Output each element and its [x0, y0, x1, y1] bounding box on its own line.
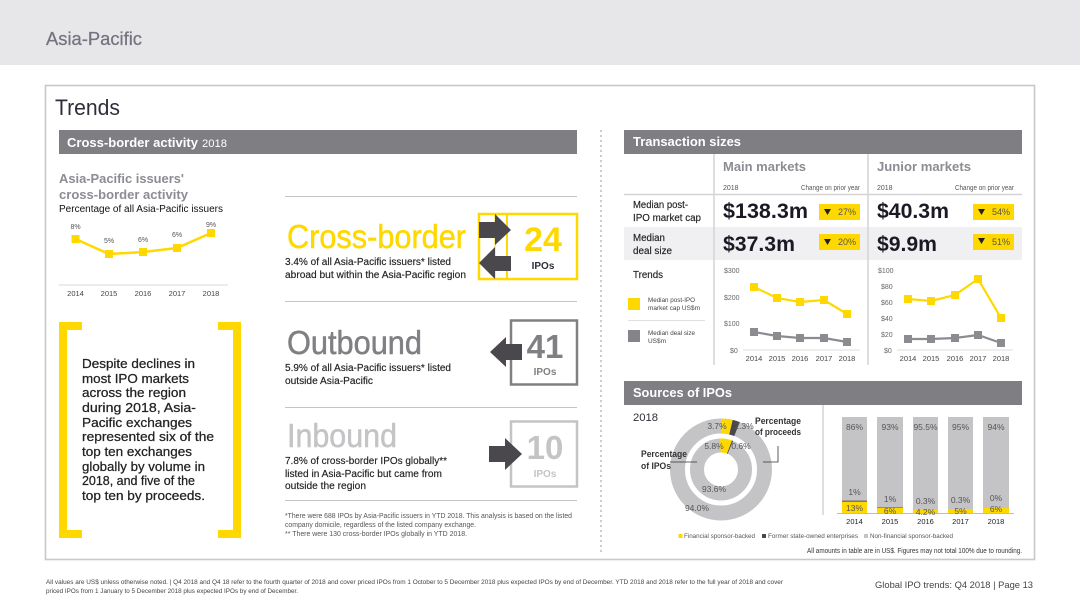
column heading: main markets: 2018	[723, 185, 739, 192]
line chart: junior markets: 2016	[947, 354, 963, 363]
line chart: main markets: 2015	[769, 354, 785, 363]
row: median deal size: 51%	[992, 237, 1010, 247]
trends legend: US$m	[648, 338, 666, 345]
block: outbound: outside Asia-Pacific	[285, 376, 373, 387]
callout with yellow brackets: across the region	[82, 386, 186, 400]
subheading: Asia-Pacific issuers	[59, 172, 223, 215]
column heading: main markets: Main markets	[723, 159, 806, 174]
block: outbound	[285, 320, 577, 387]
header band: Asia-Pacific	[46, 29, 142, 49]
line chart: cross-border percentage: 2018	[203, 289, 219, 298]
page number: Global IPO trends: Q4 2018 | Page 13	[875, 580, 1033, 591]
line chart: cross-border percentage: 9%	[206, 222, 216, 229]
line chart: main markets: 2016	[792, 354, 808, 363]
callout with yellow brackets: Pacific exchanges	[82, 416, 192, 430]
callout with yellow brackets: during 2018, Asia-	[82, 401, 196, 415]
line chart: junior markets: $0	[884, 348, 892, 355]
row: median deal size: Median	[633, 233, 665, 244]
callout with yellow brackets: most IPO markets	[82, 372, 189, 386]
footnotes: company domicile, regardless of the listed company exchange.	[285, 522, 476, 529]
donut chart: 2018: 93.6%	[702, 484, 726, 494]
block: inbound: outside the region	[285, 481, 366, 492]
column heading: main markets: Change on prior year	[801, 185, 861, 192]
donut chart: 2018: Percentage	[641, 449, 687, 459]
section heading: cross-border activity: 2018	[202, 138, 227, 150]
section heading: cross-border activity: Cross-border activity	[67, 135, 199, 150]
section heading: transaction sizes	[624, 130, 1022, 154]
main panel frame	[46, 86, 1034, 560]
line chart: junior markets: $20	[881, 332, 893, 339]
legend: IPO sources: Former state-owned enterprises	[768, 533, 859, 540]
row: median deal size: $37.3m	[723, 233, 795, 256]
stacked bar chart: 2014 to 2018: 2014	[846, 517, 863, 526]
legend: IPO sources	[678, 533, 953, 540]
line chart: cross-border percentage: 5%	[104, 238, 114, 245]
block: outbound: IPOs	[534, 367, 557, 378]
line chart: main markets: $200	[724, 295, 740, 302]
callout with yellow brackets: Despite declines in	[82, 357, 195, 371]
callout with yellow brackets: represented six of the	[82, 430, 214, 444]
row: median deal size: $9.9m	[877, 233, 937, 256]
stacked bar chart: 2014 to 2018: 1%	[848, 487, 861, 497]
trends legend: Median deal size	[648, 330, 695, 337]
donut chart: 2018: of IPOs	[641, 461, 671, 471]
callout with yellow brackets: globally by volume in	[82, 460, 205, 474]
line chart: junior markets	[878, 268, 1013, 363]
donut chart: 2018: 94.0%	[685, 503, 709, 513]
row: median post-IPO market cap: $40.3m	[877, 200, 949, 223]
line chart: cross-border percentage: 6%	[138, 237, 148, 244]
callout with yellow brackets: 2018, and five of the	[82, 474, 195, 488]
donut chart: 2018: of proceeds	[755, 427, 801, 437]
panel: transaction sizes	[624, 130, 1022, 365]
column heading: junior markets: 2018	[877, 185, 893, 192]
panel: sources of IPOs	[624, 381, 1022, 555]
line chart: cross-border percentage: 2016	[135, 289, 151, 298]
line chart: main markets: 2018	[839, 354, 855, 363]
line chart: main markets: $100	[724, 321, 740, 328]
stacked bar chart: 2014 to 2018: 93%	[881, 422, 899, 432]
line chart: cross-border percentage: 2015	[101, 289, 117, 298]
row: median deal size	[633, 233, 1014, 257]
column heading: main markets	[723, 159, 861, 192]
line chart: main markets: $0	[730, 348, 738, 355]
icon: arrows in and out	[479, 214, 511, 279]
header band	[0, 0, 1080, 65]
subheading: Asia-Pacific issuers: Percentage of all Asia-Pacific issuers	[59, 204, 223, 215]
line chart: cross-border percentage: 8%	[70, 224, 81, 231]
block: inbound: Inbound	[287, 417, 397, 454]
donut chart: 2018: Percentage	[755, 416, 801, 426]
block: outbound: 5.9% of all Asia-Pacific issuers* listed	[285, 363, 451, 374]
line chart: junior markets: 2014	[900, 354, 916, 363]
stacked bar chart: 2014 to 2018: 4.2%	[916, 507, 936, 517]
trends legend: market cap US$m	[648, 305, 700, 312]
stacked bar chart: 2014 to 2018: 1%	[884, 494, 897, 504]
column heading: junior markets	[877, 159, 1015, 192]
stacked bar chart: 2014 to 2018: 2015	[882, 517, 898, 526]
callout with yellow brackets	[59, 322, 241, 538]
line chart: cross-border percentage	[59, 222, 228, 298]
subheading: Asia-Pacific issuers: cross-border activity	[59, 188, 188, 202]
footnotes: *There were 688 IPOs by Asia-Pacific issuers in YTD 2018. This analysis is based on the listed	[285, 513, 572, 520]
legend: IPO sources: Non-financial sponsor-backed	[870, 533, 953, 540]
line chart: junior markets: $40	[881, 316, 893, 323]
stacked bar chart: 2014 to 2018: 86%	[846, 422, 863, 432]
donut chart: 2018: 2.3%	[734, 421, 754, 431]
footer note: priced IPOs from 1 January to 5 December 2018 plus expected IPOs by end of December.	[46, 588, 298, 595]
block: outbound: 41	[527, 328, 563, 365]
line chart: cross-border percentage: 6%	[172, 232, 182, 239]
section heading: sources of IPOs: Sources of IPOs	[633, 386, 732, 400]
line chart: cross-border percentage: 2014	[67, 289, 84, 298]
icon: arrow outbound	[490, 337, 522, 367]
block: cross-border: abroad but within the Asia-Pacific region	[285, 270, 466, 281]
column heading: junior markets: Change on prior year	[955, 185, 1015, 192]
section heading: sources of IPOs	[624, 381, 1022, 405]
line chart: junior markets: 2018	[993, 354, 1009, 363]
stacked bar chart: 2014 to 2018: 6%	[884, 506, 897, 516]
block: cross-border: 24	[524, 221, 562, 259]
row: median post-IPO market cap: 54%	[992, 207, 1010, 217]
line chart: junior markets: $60	[881, 300, 893, 307]
line chart: cross-border percentage: 2017	[169, 289, 185, 298]
stacked bar chart: 2014 to 2018	[837, 417, 1014, 526]
panel: cross-border activity	[59, 130, 577, 538]
table note: All amounts in table are in US$. Figures may not total 100% due to rounding.	[807, 548, 1022, 555]
stacked bar chart: 2014 to 2018: 6%	[990, 504, 1003, 514]
block: inbound: listed in Asia-Pacific but came from	[285, 469, 442, 480]
stacked bar chart: 2014 to 2018: 2017	[952, 517, 969, 526]
stacked bar chart: 2014 to 2018: 5%	[954, 506, 967, 516]
stacked bar chart: 2014 to 2018: 0.3%	[951, 495, 971, 505]
line chart: junior markets: $100	[878, 268, 894, 275]
callout with yellow brackets: top ten exchanges	[82, 445, 192, 459]
footnotes	[285, 513, 572, 538]
section heading: cross-border activity	[59, 130, 577, 154]
line chart: main markets: 2017	[816, 354, 832, 363]
line chart: junior markets: 2017	[970, 354, 986, 363]
stacked bar chart: 2014 to 2018: 95.5%	[913, 422, 938, 432]
line chart: main markets	[724, 268, 860, 363]
donut chart: 2018: 5.8%	[704, 441, 724, 451]
icon: arrow inbound	[489, 438, 522, 470]
block: cross-border: IPOs	[532, 261, 555, 272]
line chart: main markets: 2014	[746, 354, 762, 363]
row: median post-IPO market cap: 27%	[838, 207, 856, 217]
row: median deal size: deal size	[633, 246, 672, 257]
footnotes: ** There were 130 cross-border IPOs globally in YTD 2018.	[285, 531, 467, 538]
row: median post-IPO market cap: Median post-	[633, 200, 688, 211]
footer note	[46, 579, 784, 595]
row: median deal size: 20%	[838, 237, 856, 247]
donut chart: 2018: 3.7%	[707, 421, 727, 431]
block: inbound: 10	[527, 429, 563, 466]
row: median post-IPO market cap	[633, 200, 1014, 224]
block: outbound: Outbound	[287, 324, 422, 361]
donut chart: 2018: 0.6%	[731, 441, 751, 451]
footer note: All values are US$ unless otherwise noted. | Q4 2018 and Q4 18 refer to the fourth quarter of 2018 and cover priced IPOs from 1 October to 5 December 2018 plus expected IPOs by end of December. YTD 2018 and 2018 refer to the full year of 2018 and cover	[46, 579, 784, 586]
block: cross-border: 3.4% of all Asia-Pacific issuers* listed	[285, 257, 451, 268]
trends legend: Median post-IPO	[648, 297, 695, 304]
row: median post-IPO market cap: $138.3m	[723, 200, 808, 223]
trends legend	[628, 270, 705, 345]
stacked bar chart: 2014 to 2018: 0%	[990, 493, 1003, 503]
stacked bar chart: 2014 to 2018: 2018	[988, 517, 1004, 526]
block: inbound	[285, 417, 577, 492]
block: inbound: IPOs	[534, 469, 557, 480]
stacked bar chart: 2014 to 2018: 94%	[987, 422, 1005, 432]
block: cross-border	[285, 214, 577, 281]
block: cross-border: Cross-border	[287, 218, 466, 255]
legend: IPO sources: Financial sponsor-backed	[684, 533, 755, 540]
callout with yellow brackets: top ten by proceeds.	[82, 489, 205, 503]
line chart: main markets: $300	[724, 268, 740, 275]
line chart: junior markets: $80	[881, 284, 893, 291]
stacked bar chart: 2014 to 2018: 0.3%	[916, 496, 936, 506]
line chart: junior markets: 2015	[923, 354, 939, 363]
stacked bar chart: 2014 to 2018: 95%	[952, 422, 969, 432]
section heading: transaction sizes: Transaction sizes	[633, 135, 741, 149]
trends legend: Trends	[633, 270, 663, 281]
column heading: junior markets: Junior markets	[877, 159, 971, 174]
donut chart: 2018	[633, 412, 801, 513]
stacked bar chart: 2014 to 2018: 13%	[846, 503, 863, 513]
block: inbound: 7.8% of cross-border IPOs globally**	[285, 456, 447, 467]
subheading: Asia-Pacific issuers: Asia-Pacific issuers'	[59, 172, 184, 186]
row: median post-IPO market cap: IPO market cap	[633, 213, 701, 224]
title: Trends	[55, 95, 120, 120]
stacked bar chart: 2014 to 2018: 2016	[917, 517, 934, 526]
donut chart: 2018: 2018	[633, 412, 658, 424]
